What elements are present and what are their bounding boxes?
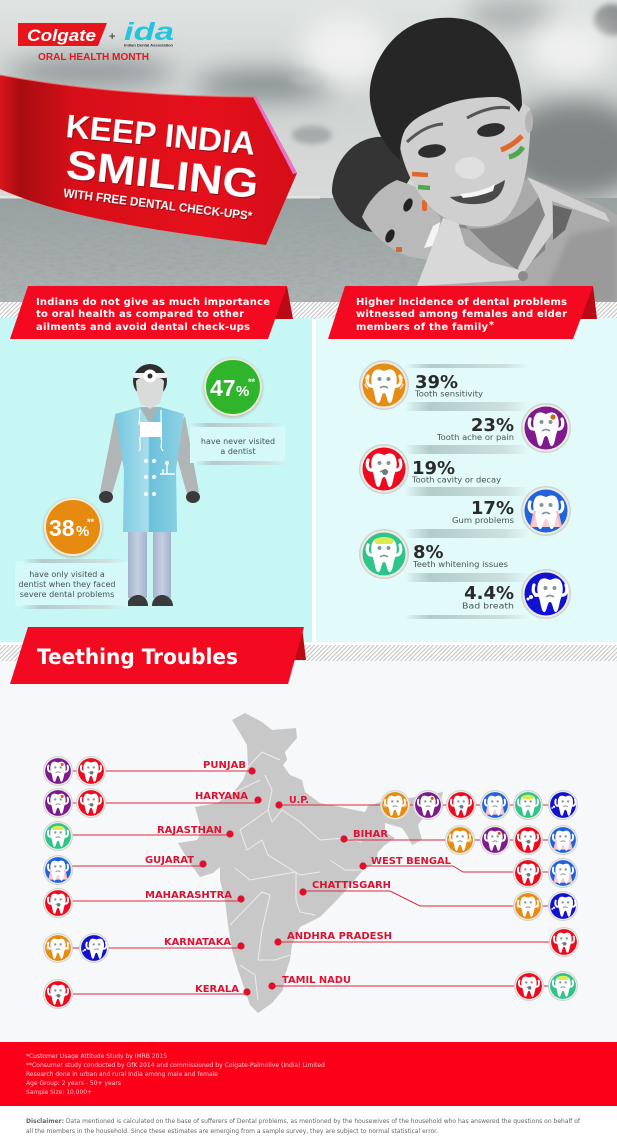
state: Punjab: PUNJAB bbox=[203, 760, 246, 771]
footer: sources: Research done in urban and rural India among male and female bbox=[26, 1071, 218, 1078]
plus sign: + bbox=[109, 31, 115, 43]
state: Chattisgarh bbox=[299, 880, 578, 921]
state: U.P.: U.P. bbox=[289, 795, 309, 806]
item: teeth whitening: 8% bbox=[413, 542, 444, 563]
boy body and shirt bbox=[417, 177, 617, 302]
state: Andhra Pradesh bbox=[274, 927, 579, 957]
Colgate wordmark: Colgate bbox=[27, 26, 96, 45]
item: teeth whitening: Teeth whitening issues bbox=[412, 560, 508, 569]
ribbon: teething troubles heading bbox=[10, 627, 306, 684]
state: Tamil Nadu bbox=[268, 971, 578, 1001]
ribbon: dental problems heading bbox=[328, 286, 597, 339]
state: Kerala bbox=[43, 979, 251, 1009]
ida wordmark: ida bbox=[124, 18, 174, 46]
footer: sources bbox=[0, 1042, 617, 1106]
state: Rajasthan: RAJASTHAN bbox=[157, 825, 222, 836]
item: tooth ache: Tooth ache or pain bbox=[436, 433, 514, 442]
stat: 47 percent: have never visited bbox=[201, 437, 275, 446]
state: West Bengal bbox=[359, 856, 578, 888]
item: gum problems bbox=[452, 486, 571, 536]
hero photo: children against sea and sky bbox=[0, 0, 617, 304]
state: West Bengal: WEST BENGAL bbox=[371, 856, 451, 867]
stat: 38 percent: ** bbox=[87, 517, 95, 527]
state: Andhra Pradesh: ANDHRA PRADESH bbox=[287, 931, 392, 942]
state: Haryana: HARYANA bbox=[195, 791, 249, 802]
map of India bbox=[178, 713, 443, 1013]
stat: 47 percent bbox=[190, 358, 287, 465]
state: Bihar: BIHAR bbox=[353, 829, 389, 840]
stat: 47 percent: a dentist bbox=[220, 447, 256, 456]
small boy bbox=[332, 137, 441, 260]
item: gum problems: Gum problems bbox=[452, 516, 514, 525]
state: Rajasthan bbox=[43, 821, 234, 851]
item: tooth sensitivity bbox=[359, 360, 483, 410]
state: Haryana bbox=[43, 788, 262, 818]
stat: 38 percent: have only visited a bbox=[29, 570, 105, 579]
state: Chattisgarh: CHATTISGARH bbox=[312, 880, 391, 891]
ribbon: doctor visits heading: Indians do not give as much importance bbox=[36, 297, 270, 308]
stat: 47 percent: ** bbox=[248, 377, 256, 387]
item: tooth cavity: Tooth cavity or decay bbox=[411, 476, 501, 484]
headline line one: KEEP INDIA bbox=[64, 108, 257, 162]
doctor illustration bbox=[99, 364, 200, 606]
section: teething troubles bbox=[0, 627, 617, 1042]
ribbon: dental problems heading: members of the family bbox=[356, 322, 488, 333]
state: Maharashtra bbox=[43, 888, 245, 918]
stat: 38 percent: 38 bbox=[49, 515, 75, 541]
ribbon: teething troubles heading: Teething Troubles bbox=[37, 645, 238, 669]
item: teeth whitening bbox=[359, 529, 508, 579]
state: Gujarat bbox=[43, 855, 207, 885]
panel: dental problems bbox=[316, 286, 617, 642]
ribbon: dental problems heading: witnessed among females and elder bbox=[356, 309, 567, 320]
big boy hair bbox=[370, 18, 522, 160]
state: Karnataka bbox=[43, 933, 245, 963]
ribbon: dental problems heading: Higher incidence of dental problems bbox=[356, 297, 567, 308]
item: tooth cavity bbox=[359, 444, 501, 494]
item: bad breath bbox=[462, 569, 571, 619]
oral health month: ORAL HEALTH MONTH bbox=[38, 52, 149, 63]
state: Karnataka: KARNATAKA bbox=[164, 937, 232, 948]
state: Tamil Nadu: TAMIL NADU bbox=[282, 975, 351, 986]
ida tagline: Indian Dental Association bbox=[124, 42, 174, 48]
state: U.P. bbox=[275, 790, 578, 820]
big boy face bbox=[399, 88, 533, 227]
ribbon: doctor visits heading bbox=[10, 286, 293, 339]
state: Gujarat: GUJARAT bbox=[145, 855, 195, 866]
stat: 47 percent: 47 bbox=[210, 375, 236, 401]
item: tooth sensitivity: Tooth sensitivity bbox=[414, 390, 483, 398]
stat: 38 percent bbox=[15, 498, 128, 609]
item: bad breath: Bad breath bbox=[462, 602, 514, 610]
disclaimer: all the members in the household. Since these estimates are emerging from a sample survey, they are subject to normal statistical error. bbox=[26, 1128, 438, 1135]
connector lines bbox=[58, 771, 564, 994]
state: Maharashtra: MAHARASHTRA bbox=[145, 890, 233, 901]
hatch strip bbox=[0, 302, 617, 319]
ribbon: doctor visits heading: to oral health as compared to other bbox=[36, 309, 244, 320]
disclaimer: Disclaimer: Data mentioned is calculated on the base of sufferers of Dental problems, as mentioned by the housewives of the household who has answered the questions on behalf of bbox=[26, 1118, 581, 1125]
item: tooth sensitivity: 39% bbox=[415, 372, 458, 393]
footer: sources: Age Group: 2 years - 50+ years bbox=[26, 1080, 121, 1087]
stat: 38 percent: severe dental problems bbox=[20, 590, 114, 599]
list background bands bbox=[405, 364, 530, 619]
disclaimer bbox=[26, 1118, 581, 1135]
item: bad breath: 4.4% bbox=[464, 583, 514, 604]
banner: Keep India Smiling bbox=[0, 75, 297, 245]
logos: Colgate + ida bbox=[18, 18, 174, 63]
state: Kerala: KERALA bbox=[195, 984, 240, 995]
stat: 38 percent: dentist when they faced bbox=[19, 580, 115, 589]
footer: sources: **Consumer study conducted by GfK 2014 and commissioned by Colgate-Palmolive (India) Limited bbox=[26, 1062, 325, 1069]
footer: sources: *Customer Usage Attitude Study by IMRB 2015 bbox=[26, 1053, 167, 1060]
state: Punjab bbox=[43, 756, 256, 786]
headline sub-line: WITH FREE DENTAL CHECK-UPS* bbox=[63, 188, 253, 223]
item: tooth cavity: 19% bbox=[412, 458, 455, 479]
headline line two: SMILING bbox=[64, 141, 261, 207]
ribbon: dental problems heading: * bbox=[489, 320, 495, 331]
stat: 38 percent: % bbox=[76, 523, 89, 540]
panel: doctor visits bbox=[0, 286, 312, 642]
ribbon: doctor visits heading: ailments and avoid dental check-ups bbox=[36, 322, 250, 333]
stat: 47 percent: % bbox=[236, 383, 249, 400]
footer: sources: Sample Size: 10,000+ bbox=[26, 1089, 92, 1096]
state: Bihar bbox=[340, 825, 578, 855]
item: tooth ache: 23% bbox=[471, 415, 514, 436]
item: tooth ache bbox=[436, 403, 571, 453]
item: gum problems: 17% bbox=[471, 498, 514, 519]
